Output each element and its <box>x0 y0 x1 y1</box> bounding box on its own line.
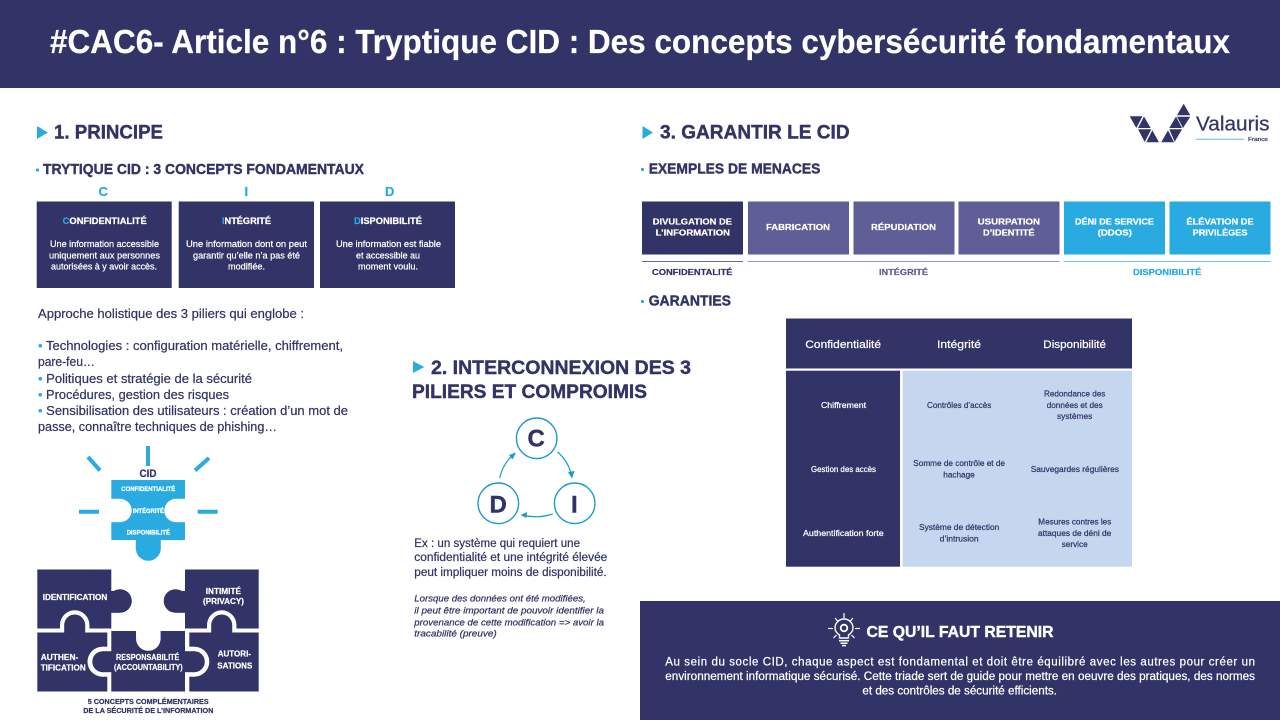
column: confidentialité: Authentification forte <box>803 528 884 538</box>
text block: traceability note <box>413 594 604 640</box>
text block: approche holistique <box>38 306 348 434</box>
threat: fabrication <box>748 202 849 254</box>
card: confidentialité: CONFIDENTIALITÉ <box>63 216 147 226</box>
card: disponibilité: DISPONIBILITÉ <box>354 216 422 226</box>
table header: Disponibilité <box>1043 339 1106 351</box>
table header: Intégrité <box>937 339 981 351</box>
puzzle: 5 complementary concepts: SATIONS <box>217 661 253 671</box>
title: #CAC6- Article n°6 : Tryptique CID : Des concepts cybersécurité fondamentaux <box>50 23 1231 60</box>
card: intégrité: Une information dont on peut <box>186 239 308 249</box>
text block: example <box>414 538 607 579</box>
CID letters: I <box>244 184 248 199</box>
threat: divulgation <box>642 202 743 254</box>
columns: intégrité and disponibilité: Redondance des <box>1044 389 1105 399</box>
columns: intégrité and disponibilité: Somme de contrôle et de <box>913 458 1005 468</box>
panel body text: environnement informatique sécurisé. Cette triade sert de guide pour mettre en oeuvre des pratiques, des normes <box>665 671 1255 683</box>
threat: déni de service: DÉNI DE SERVICE <box>1075 216 1154 226</box>
CID letters: D <box>385 184 394 199</box>
icon: CID puzzle piece with rays <box>79 446 218 561</box>
section 3 heading: 3. GARANTIR LE CID <box>660 122 850 144</box>
CID letters <box>98 184 394 199</box>
threat: usurpation: D’IDENTITÉ <box>983 228 1035 238</box>
logo: Valauris: France <box>1248 137 1268 143</box>
diagram: C I D cycle: C <box>528 426 545 453</box>
icon: CID puzzle piece with rays: DISPONIBILITÉ <box>127 528 170 536</box>
threat category labels: DISPONIBILITÉ <box>1133 267 1202 277</box>
text block: example: confidentialité et une intégrité élevée <box>414 552 607 564</box>
puzzle: 5 complementary concepts: TIFICATION <box>41 663 86 673</box>
panel body text: et des contrôles de sécurité efficients. <box>862 686 1057 698</box>
card: disponibilité: et accessible au <box>356 250 420 260</box>
text block: approche holistique: passe, connaître techniques de phishing… <box>38 419 277 434</box>
header banner <box>0 0 1280 88</box>
diagram: C I D cycle <box>478 418 595 524</box>
text block: traceability note: il peut être important de pouvoir identifier la <box>414 605 604 616</box>
threat: élévation de privilèges <box>1170 202 1270 254</box>
icon: CID puzzle piece with rays: INTÉGRITÉ <box>133 507 164 515</box>
card: intégrité: INTÉGRITÉ <box>222 216 271 226</box>
columns: intégrité and disponibilité: hachage <box>943 470 975 480</box>
panel heading: CE QU’IL FAUT RETENIR <box>866 624 1054 641</box>
puzzle: 5 complementary concepts: RESPONSABILITÉ <box>116 653 180 662</box>
columns: intégrité and disponibilité: Mesures contres les <box>1038 516 1111 526</box>
puzzle caption <box>83 697 213 715</box>
diagram: C I D cycle: I <box>571 491 578 518</box>
columns: intégrité and disponibilité <box>903 371 1132 567</box>
table header <box>786 318 1132 368</box>
section 1 heading: 1. PRINCIPE <box>54 122 163 144</box>
puzzle: 5 complementary concepts: INTIMITÉ <box>206 586 241 596</box>
subheading: exemples de menaces: EXEMPLES DE MENACES <box>649 162 821 178</box>
section 2 heading: PILIERS ET COMPROIMIS <box>412 381 647 403</box>
columns: intégrité and disponibilité: Système de détection <box>919 522 1000 532</box>
logo: Valauris: Valauris <box>1196 114 1270 136</box>
column: confidentialité: Gestion des accès <box>811 464 876 474</box>
card: intégrité: modifiée. <box>228 262 265 272</box>
table: garanties <box>786 318 1132 567</box>
puzzle: 5 complementary concepts: (PRIVACY) <box>203 596 244 606</box>
threat: divulgation: L’INFORMATION <box>656 228 730 238</box>
text block: approche holistique: • Technologies : configuration matérielle, chiffrement, <box>38 338 343 353</box>
puzzle caption: DE LA SÉCURITÉ DE L’INFORMATION <box>83 706 213 715</box>
threat: répudiation: RÉPUDIATION <box>871 222 936 232</box>
icon: CID puzzle piece with rays: CONFIDENTIALITÉ <box>121 485 175 493</box>
logo: Valauris <box>1130 104 1270 143</box>
threat: élévation de privilèges: PRIVILÈGES <box>1193 228 1248 238</box>
icon: light bulb <box>828 613 860 646</box>
columns: intégrité and disponibilité: service <box>1062 539 1088 549</box>
table header: Confidentialité <box>805 339 881 351</box>
text block: traceability note: provenance de cette modification => avoir la <box>413 617 604 628</box>
card: intégrité: garantir qu’elle n’a pas été <box>193 250 300 260</box>
text block: approche holistique: pare-feu… <box>38 354 95 369</box>
columns: intégrité and disponibilité: d’intrusion <box>940 534 979 544</box>
puzzle: 5 complementary concepts <box>37 570 259 692</box>
text block: approche holistique: Approche holistique des 3 piliers qui englobe : <box>38 306 304 321</box>
columns: intégrité and disponibilité: Contrôles d’accès <box>927 400 991 410</box>
puzzle caption: 5 CONCEPTS COMPLÉMENTAIRES <box>88 697 209 706</box>
diagram: C I D cycle: D <box>490 491 507 518</box>
columns: intégrité and disponibilité: Sauvegardes régulières <box>1031 464 1119 474</box>
threat: usurpation <box>958 202 1060 254</box>
threat category labels <box>642 261 1270 277</box>
columns: intégrité and disponibilité: données et des <box>1047 400 1103 410</box>
card: confidentialité <box>37 202 172 288</box>
text block: approche holistique: • Procédures, gestion des risques <box>38 387 229 402</box>
section 2 heading: 2. INTERCONNEXION DES 3 <box>431 357 691 379</box>
subheading: tryptique: TRYTIQUE CID : 3 CONCEPTS FONDAMENTAUX <box>43 162 364 178</box>
puzzle: 5 complementary concepts: IDENTIFICATION <box>43 592 107 602</box>
card: confidentialité: autorisées à y avoir accès. <box>51 262 157 272</box>
card: confidentialité: uniquement aux personnes <box>49 250 161 260</box>
card: disponibilité: Une information est fiable <box>336 239 441 249</box>
columns: intégrité and disponibilité: attaques de déni de <box>1038 528 1112 538</box>
card: disponibilité: moment voulu. <box>358 262 418 272</box>
threat: répudiation <box>854 202 954 254</box>
column: confidentialité <box>786 371 900 567</box>
column: confidentialité: Chiffrement <box>821 400 867 410</box>
icon: CID puzzle piece with rays: CID <box>140 468 157 480</box>
threat: fabrication: FABRICATION <box>766 222 830 232</box>
CID letters: C <box>98 184 108 199</box>
text block: traceability note: Lorsque des données ont été modifiées, <box>414 594 586 605</box>
threat: divulgation: DIVULGATION DE <box>653 216 732 226</box>
puzzle: 5 complementary concepts: AUTORI- <box>218 649 251 659</box>
panel: ce qu'il faut retenir <box>640 601 1280 720</box>
text block: example: peut impliquer moins de disponibilité. <box>414 567 607 579</box>
card: intégrité <box>179 202 314 288</box>
text block: traceability note: tracabilité (preuve) <box>414 629 497 640</box>
threat: usurpation: USURPATION <box>978 216 1040 226</box>
text block: approche holistique: • Sensibilisation des utilisateurs : création d’un mot de <box>38 403 348 418</box>
panel body text: Au sein du socle CID, chaque aspect est fondamental et doit être équilibré avec les autres pour créer un <box>665 656 1255 668</box>
text block: approche holistique: • Politiques et stratégie de la sécurité <box>38 371 252 386</box>
threat: élévation de privilèges: ÉLÉVATION DE <box>1186 216 1254 226</box>
panel body text <box>665 656 1255 698</box>
puzzle: 5 complementary concepts: (ACCOUNTABILITY) <box>114 663 183 672</box>
subheading: garanties: GARANTIES <box>649 294 731 310</box>
puzzle: 5 complementary concepts: AUTHEN- <box>41 652 78 662</box>
text block: example: Ex : un système qui requiert une <box>414 538 580 550</box>
threat: déni de service <box>1064 202 1165 254</box>
threat category labels: CONFIDENTALITÉ <box>652 267 733 277</box>
threat: déni de service: (DDOS) <box>1098 228 1132 238</box>
threat category labels: INTÉGRITÉ <box>879 267 928 277</box>
card: confidentialité: Une information accessible <box>50 239 159 249</box>
columns: intégrité and disponibilité: systèmes <box>1057 411 1092 421</box>
card: disponibilité <box>320 202 455 288</box>
section 2 heading <box>412 357 691 403</box>
